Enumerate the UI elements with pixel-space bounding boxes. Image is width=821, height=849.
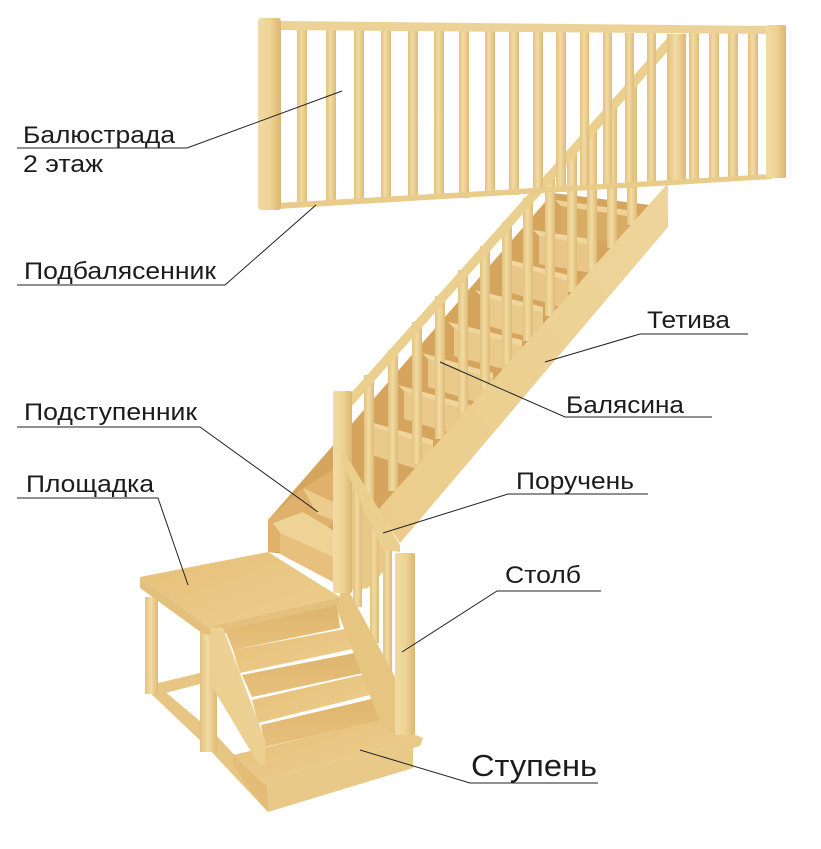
label: Поручень xyxy=(383,468,648,533)
upper flight: handrail xyxy=(352,36,669,406)
upper flight: balusters xyxy=(364,83,637,518)
label: Балюстрада 2 этаж: Балюстрада xyxy=(23,122,176,149)
label: Поручень: Поручень xyxy=(516,468,634,495)
lower steps under the turn xyxy=(268,470,340,582)
left post xyxy=(258,18,281,210)
platform top xyxy=(140,552,340,627)
label: Подступенник xyxy=(17,399,318,512)
label: Подступенник: Подступенник xyxy=(24,399,198,426)
right post xyxy=(766,25,786,178)
stringer xyxy=(378,183,668,543)
platform xyxy=(140,552,340,812)
bottom rail, подбалясенник xyxy=(278,174,772,209)
balusters xyxy=(297,29,758,205)
upper flight: steps xyxy=(268,193,650,560)
balustrade second floor xyxy=(258,18,786,210)
label: Столб xyxy=(402,562,601,652)
label: Тетива xyxy=(545,307,748,362)
turn panel balusters xyxy=(352,470,395,673)
label: Площадка xyxy=(17,471,188,585)
lower left stringer xyxy=(210,627,265,767)
lower newel post, столб xyxy=(395,553,415,735)
platform edge xyxy=(140,577,340,636)
illustration: wooden staircase xyxy=(140,18,786,812)
label: Балясина xyxy=(440,362,712,419)
label: Подбалясенник xyxy=(17,205,316,285)
top rail xyxy=(278,21,775,34)
back newel post top of flight xyxy=(667,34,686,180)
label: Балясина: Балясина xyxy=(566,392,685,419)
label: Тетива: Тетива xyxy=(647,307,731,334)
lower flight steps xyxy=(225,605,423,812)
label: Ступень xyxy=(360,748,598,783)
label: Столб: Столб xyxy=(505,562,581,589)
label: Площадка: Площадка xyxy=(26,471,155,498)
label: Балюстрада 2 этаж xyxy=(17,91,342,178)
handrail, поручень xyxy=(342,448,400,552)
platform frame xyxy=(145,597,272,812)
newel post xyxy=(333,391,352,593)
lower right stringer xyxy=(337,580,395,735)
label: Ступень: Ступень xyxy=(471,748,597,783)
label: Подбалясенник: Подбалясенник xyxy=(24,258,217,285)
label: Балюстрада 2 этаж: 2 этаж xyxy=(23,151,103,178)
